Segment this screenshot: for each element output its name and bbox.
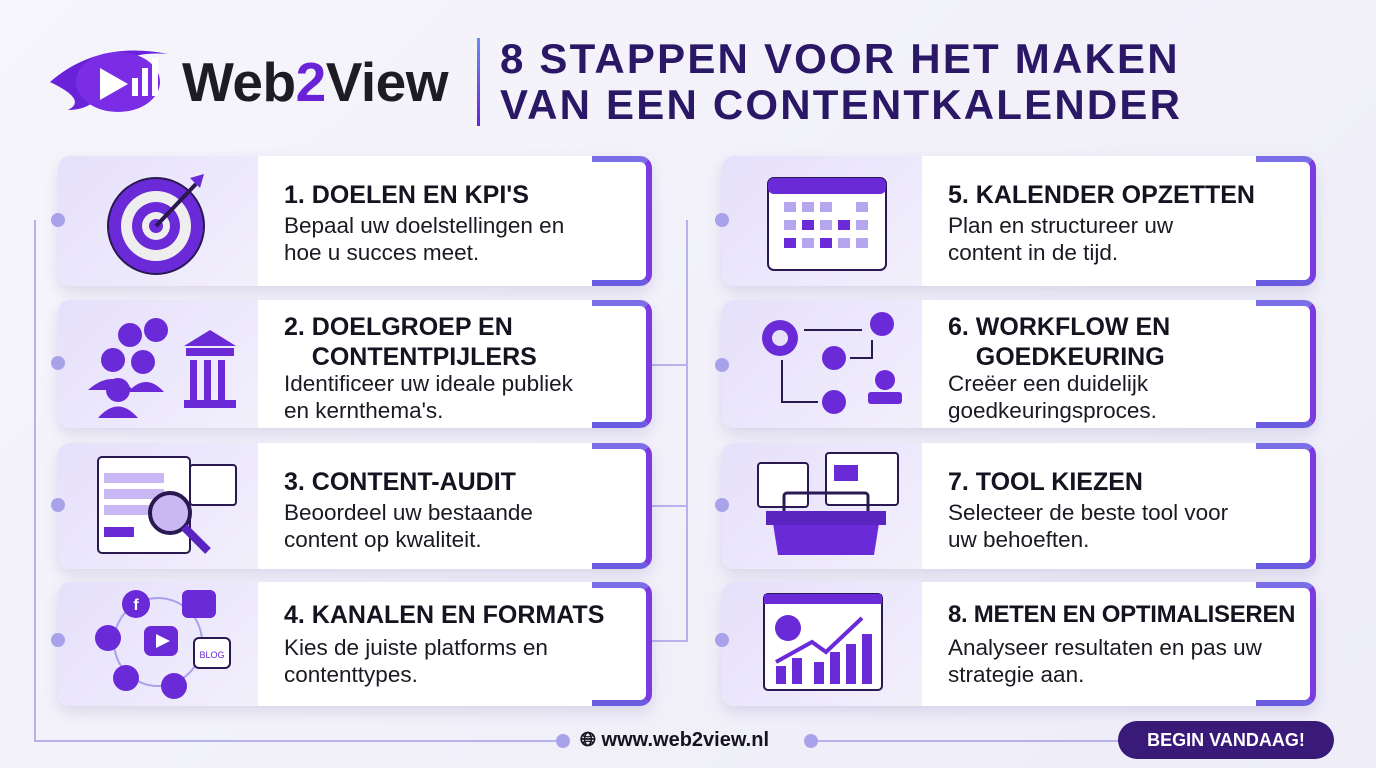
card 3: content op kwaliteit. (284, 527, 482, 552)
card 4: 4. KANALEN EN FORMATS (284, 601, 604, 629)
card 5: Plan en structureer uw (948, 213, 1173, 238)
title: 8 STAPPEN VOOR HET MAKEN (500, 35, 1180, 82)
card 2 (58, 300, 652, 428)
card 2: CONTENTPIJLERS (312, 343, 537, 371)
card 2: 2. DOELGROEP EN (284, 313, 513, 341)
card 8: 8. METEN EN OPTIMALISEREN (948, 601, 1295, 628)
card 6: goedkeuringsproces. (948, 398, 1157, 423)
card 7: 7. TOOL KIEZEN (948, 468, 1143, 496)
logo (50, 50, 449, 113)
button (1118, 721, 1334, 759)
title (500, 35, 1182, 128)
card 6 (722, 300, 1316, 428)
card 5: 5. KALENDER OPZETTEN (948, 181, 1255, 209)
card 1: Bepaal uw doelstellingen en (284, 213, 564, 238)
card 8: strategie aan. (948, 662, 1084, 687)
card 7: Selecteer de beste tool voor (948, 500, 1228, 525)
card 7 (722, 443, 1316, 569)
card 4: f (133, 597, 139, 614)
card 7: uw behoeften. (948, 527, 1089, 552)
card 3: 3. CONTENT-AUDIT (284, 468, 516, 496)
card 3 (58, 443, 652, 569)
card 6: Creëer een duidelijk (948, 371, 1148, 396)
card 1: hoe u succes meet. (284, 240, 479, 265)
card 3: Beoordeel uw bestaande (284, 500, 533, 525)
card 8: Analyseer resultaten en pas uw (948, 635, 1262, 660)
card 5: content in de tijd. (948, 240, 1118, 265)
card 2: Identificeer uw ideale publiek (284, 371, 573, 396)
card 1 (58, 156, 652, 286)
connectors (34, 220, 36, 741)
card 2: en kernthema's. (284, 398, 443, 423)
card 1: 1. DOELEN EN KPI'S (284, 181, 529, 209)
card 6: 6. WORKFLOW EN (948, 313, 1170, 341)
card 4 (58, 582, 652, 706)
footer url: 🌐︎ www.web2view.nl (580, 729, 769, 751)
card 8 (722, 582, 1316, 706)
logo: Web2View (182, 51, 448, 113)
card 4: BLOG (199, 650, 225, 660)
card 4: Kies de juiste platforms en (284, 635, 548, 660)
button: BEGIN VANDAAG! (1147, 730, 1305, 750)
card 6: GOEDKEURING (976, 343, 1165, 371)
card 5 (722, 156, 1316, 286)
card 4: contenttypes. (284, 662, 418, 687)
title: VAN EEN CONTENTKALENDER (500, 81, 1182, 128)
